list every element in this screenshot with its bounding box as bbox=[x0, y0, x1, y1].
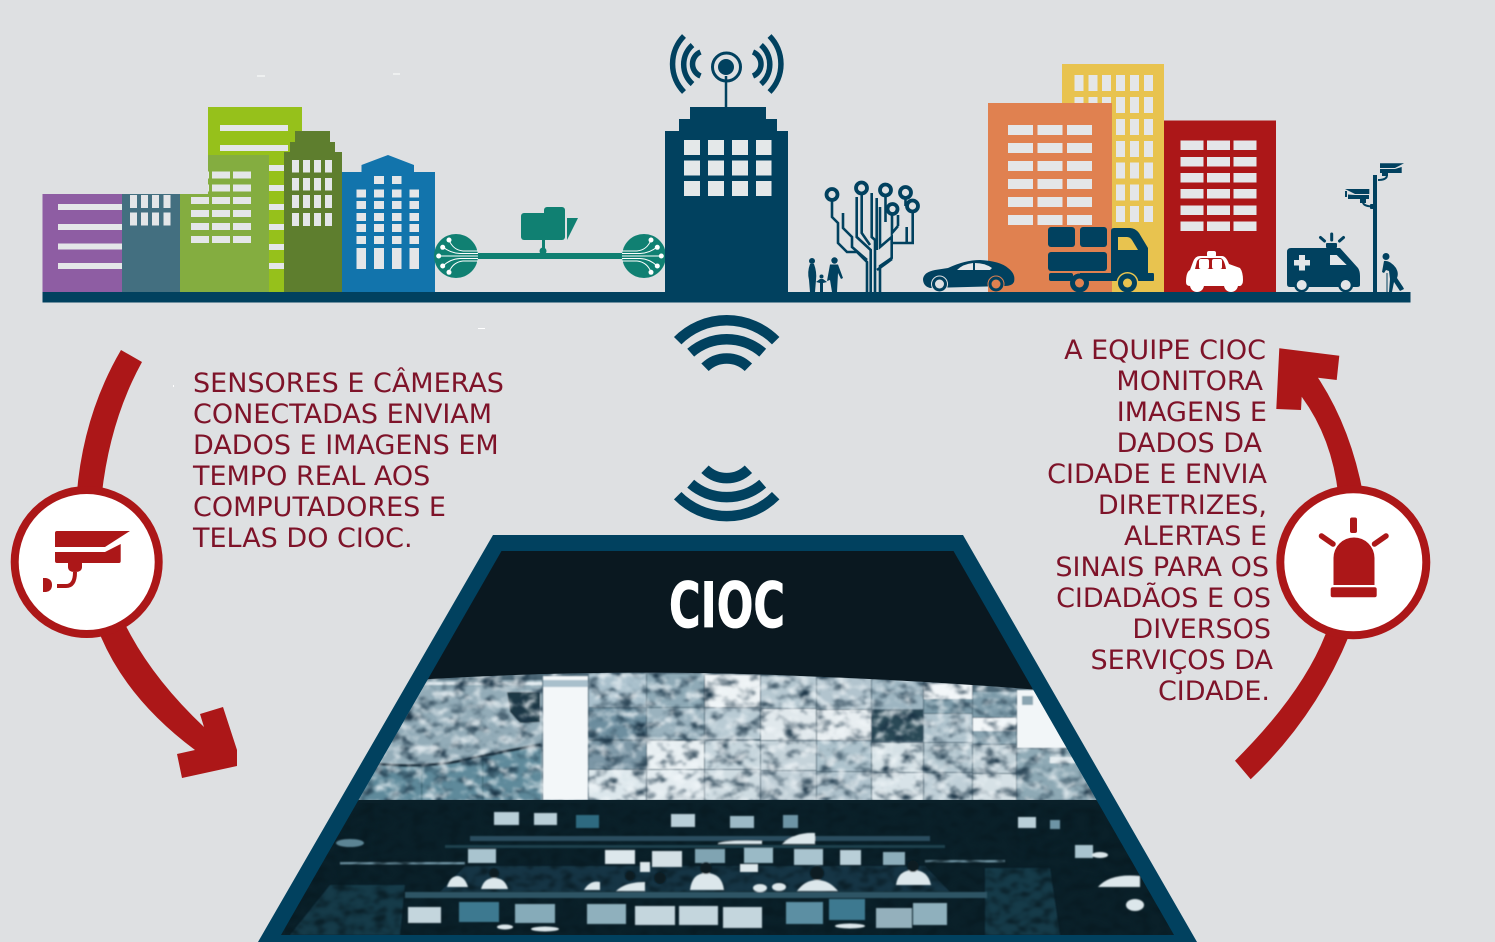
right text block: DIVERSOS bbox=[1132, 614, 1271, 645]
left text block: DADOS E IMAGENS EM bbox=[193, 430, 499, 461]
control room photo bbox=[270, 545, 1190, 942]
tiny marks bbox=[173, 74, 485, 387]
floor lighter areas bbox=[290, 860, 1060, 935]
screen light speckle bbox=[342, 670, 1112, 805]
right text block: IMAGENS E bbox=[1117, 397, 1267, 428]
icon: camera pole bbox=[1345, 163, 1404, 292]
badge circle bbox=[1280, 489, 1426, 635]
tower windows bbox=[684, 140, 772, 196]
left text block: COMPUTADORES E bbox=[193, 492, 446, 523]
skyline: left buildings bbox=[42, 107, 435, 292]
building: slate bbox=[122, 194, 180, 292]
icon: left circuit node bbox=[434, 234, 478, 278]
right text block: A EQUIPE CIOC bbox=[1064, 335, 1266, 366]
badge circle bbox=[15, 490, 159, 634]
skyline: right buildings bbox=[988, 64, 1276, 292]
building: blue bbox=[342, 155, 435, 292]
building: orange bbox=[988, 103, 1112, 292]
icon: family bbox=[808, 257, 843, 292]
icon: antenna bbox=[673, 36, 781, 107]
heading: CIOC: CIOC bbox=[669, 569, 785, 642]
icon: car bbox=[923, 260, 1014, 292]
right text block: MONITORA bbox=[1116, 366, 1264, 397]
icon: wifi top bbox=[678, 320, 776, 367]
tower body bbox=[665, 107, 788, 292]
building: yellow bbox=[1062, 64, 1164, 292]
right text block: DIRETRIZES, bbox=[1098, 490, 1267, 521]
icon: circuit tree bbox=[826, 182, 918, 292]
right text block: CIDADE. bbox=[1158, 676, 1270, 707]
right text block: DADOS DA bbox=[1117, 428, 1263, 459]
building: purple bbox=[42, 194, 122, 292]
dark upper wall bbox=[422, 551, 1034, 690]
icon: folder camera bbox=[521, 207, 578, 254]
floor speckle bbox=[290, 844, 1162, 935]
ground line bbox=[42, 292, 1410, 302]
solid white column bbox=[543, 676, 1117, 800]
building: dark green bbox=[284, 131, 342, 292]
icon: walking person with cane bbox=[1382, 253, 1404, 292]
right text block: SERVIÇOS DA bbox=[1090, 645, 1274, 676]
right text block: CIDADÃOS E OS bbox=[1056, 582, 1271, 614]
right arrow with alarm badge bbox=[1235, 348, 1426, 779]
cable bbox=[476, 253, 624, 259]
arrow: outgoing segment bbox=[101, 622, 237, 778]
arrow: upper segment bbox=[1276, 348, 1363, 495]
desks bbox=[405, 836, 987, 898]
building: mid green bbox=[180, 155, 269, 292]
floor contents bbox=[336, 812, 1144, 932]
arrow: incoming segment bbox=[77, 350, 142, 495]
central tower with antenna bbox=[665, 36, 788, 292]
monitors row 2 bbox=[468, 845, 1093, 872]
building: red bbox=[1164, 120, 1276, 292]
left text block: TELAS DO CIOC. bbox=[192, 523, 413, 554]
monitors row 1 bbox=[494, 812, 1060, 829]
left text block: CONECTADAS ENVIAM bbox=[193, 399, 492, 430]
lower floor bbox=[270, 800, 1190, 942]
icon: truck bbox=[1048, 227, 1154, 294]
icon: right circuit node bbox=[622, 234, 666, 278]
operators bbox=[336, 833, 1144, 932]
left text block: TEMPO REAL AOS bbox=[192, 461, 430, 492]
right text block: ALERTAS E bbox=[1124, 521, 1267, 552]
right text block: SINAIS PARA OS bbox=[1055, 552, 1269, 583]
icon: wifi bottom bbox=[678, 469, 776, 516]
right text block: CIDADE E ENVIA bbox=[1047, 459, 1268, 490]
operator heads bbox=[489, 860, 919, 884]
screen dark speckle bbox=[342, 670, 1112, 805]
arrow: lower segment bbox=[1235, 630, 1349, 779]
left arrow with camera badge bbox=[15, 350, 237, 778]
icon: police car bbox=[1186, 251, 1243, 292]
panel frame bbox=[258, 535, 1197, 942]
video wall bbox=[340, 670, 1120, 805]
icon: ambulance bbox=[1287, 234, 1360, 292]
building: light green tall bbox=[208, 107, 302, 292]
icon: alarm light bbox=[1322, 518, 1386, 597]
monitors row 3 bbox=[408, 899, 947, 928]
left text block: SENSORES E CÂMERAS bbox=[193, 367, 504, 399]
network link with camera bbox=[434, 207, 666, 278]
control room panel bbox=[258, 535, 1197, 942]
icon: security camera bbox=[43, 531, 130, 592]
